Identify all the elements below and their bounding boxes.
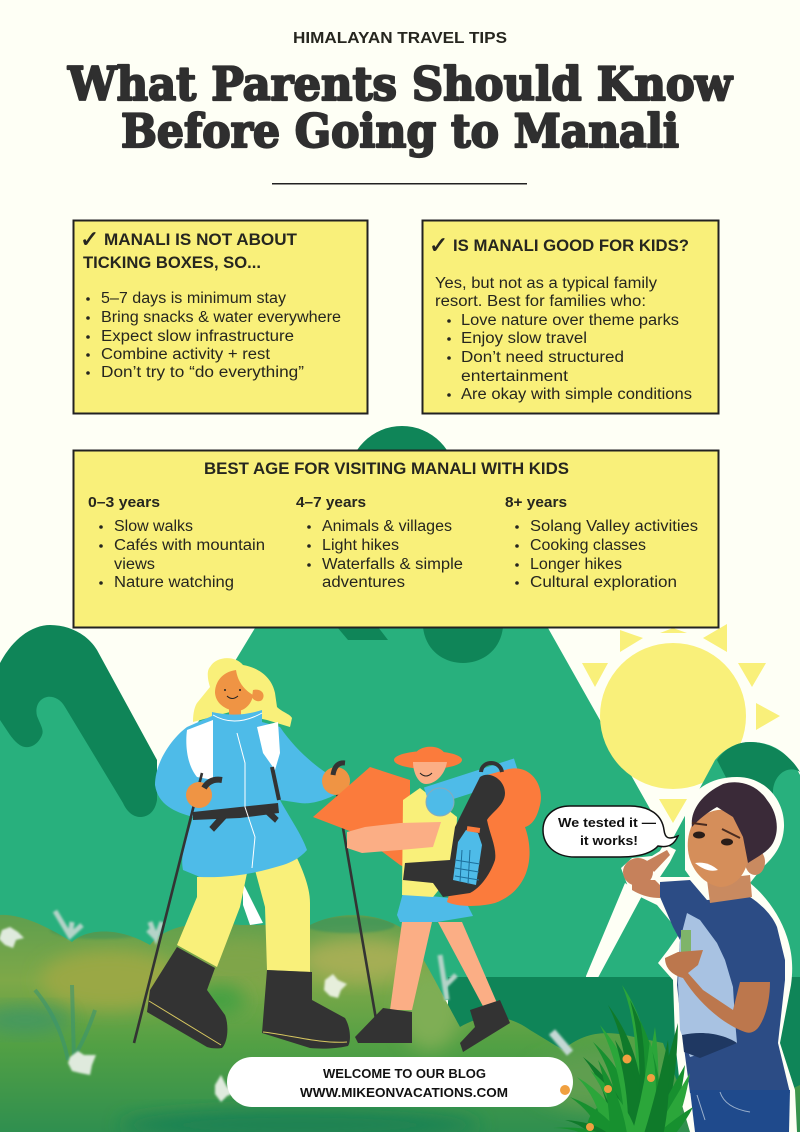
column: 8+ years: Solang Valley activities [530,518,698,535]
column: 0-3 years: Slow walks [114,518,193,535]
footer pill: blog link: WWW.MIKEONVACATIONS.COM [300,1085,508,1100]
folded arm and fist [665,950,770,1033]
column: 4-7 years: 4–7 years [296,494,366,511]
t-shirt [660,880,790,1093]
neck [707,875,752,903]
mountain peak cap [348,426,456,534]
shirt print [678,913,737,1057]
panel heading [80,227,298,272]
column: 4-7 years: Waterfalls & simple [322,556,463,573]
column: 8+ years: Cooking classes [530,537,646,554]
footer pill: blog link: WELCOME TO OUR BLOG [323,1066,486,1081]
ground: green watercolor hills [0,905,800,1132]
column: 0-3 years: views [114,556,155,573]
header: eyebrow: HIMALAYAN TRAVEL TIPS [293,30,507,47]
right mountain dark cap [717,742,800,810]
illustration: child hiker with backpack [313,747,541,1052]
panel heading: ✓ [80,227,99,253]
white cut-out outline [621,777,797,1132]
column: 4-7 years: adventures [322,574,405,591]
kids list: Don’t need structured [461,349,624,366]
panel heading: IS MANALI GOOD FOR KIDS? [453,236,689,255]
kids list: Love nature over theme parks [461,312,679,329]
kids list: Enjoy slow travel [461,330,587,347]
kids list: Are okay with simple conditions [461,386,692,403]
jeans [690,1090,790,1132]
column: 4-7 years: Animals & villages [322,518,452,535]
panel heading [429,233,689,259]
intro text [435,275,657,310]
speech bubble [543,806,678,857]
sun [582,624,780,823]
pale plants and flowers [0,911,570,1102]
pointing arm and hand [623,850,670,898]
illustration: woman hiker [134,658,377,1049]
column: 0-3 years: Nature watching [114,574,234,591]
tips list: Combine activity + rest [101,346,271,363]
illustration: grass tuft [553,985,693,1132]
column: 4-7 years: Light hikes [322,537,399,554]
left dark ridge [0,625,157,817]
panel heading: ✓ [429,233,448,259]
intro text: resort. Best for families who: [435,293,646,310]
column: 8+ years [505,494,698,591]
white valley spike [586,883,640,976]
column: 8+ years: Longer hikes [530,556,622,573]
title: Before Going to Manali [121,104,679,158]
footer pill: blog link [227,1057,573,1107]
speech bubble: it works! [580,833,638,848]
title [67,57,733,158]
tips list: Expect slow infrastructure [101,328,294,345]
photo cut-out: boy giving thumbs up [621,777,797,1132]
dark ridge below the centre peak [337,627,503,663]
column: 8+ years: 8+ years [505,494,567,511]
dark green base band [448,977,800,1132]
kids list: entertainment [461,368,569,385]
title: What Parents Should Know [67,57,733,111]
speech bubble: We tested it — [558,815,656,830]
tips list: Bring snacks & water everywhere [101,309,341,326]
ear [745,849,765,875]
intro text: Yes, but not as a typical family [435,275,657,292]
main green mountain [0,500,667,1000]
scenery: mountains and sun [0,426,800,1132]
hair [692,782,777,863]
column: 8+ years: Cultural exploration [530,574,677,591]
panel: is Manali good for kids [422,220,718,414]
tips list: 5–7 days is minimum stay [101,290,286,307]
tips list: Don’t try to “do everything” [101,364,304,381]
column: 0-3 years: Cafés with mountain [114,537,265,554]
kids list [447,312,692,403]
column: 0-3 years [88,494,265,591]
face [688,810,750,887]
tips list [86,290,341,381]
panel: best age [74,450,718,628]
column: 0-3 years: 0–3 years [88,494,160,511]
panel: not about ticking boxes [74,220,368,414]
panel heading: TICKING BOXES, SO... [83,253,261,272]
panel heading: BEST AGE FOR VISITING MANALI WITH KIDS [204,459,569,478]
right mountain [586,742,800,1000]
column: 4-7 years [296,494,463,591]
panel heading: MANALI IS NOT ABOUT [104,230,298,249]
